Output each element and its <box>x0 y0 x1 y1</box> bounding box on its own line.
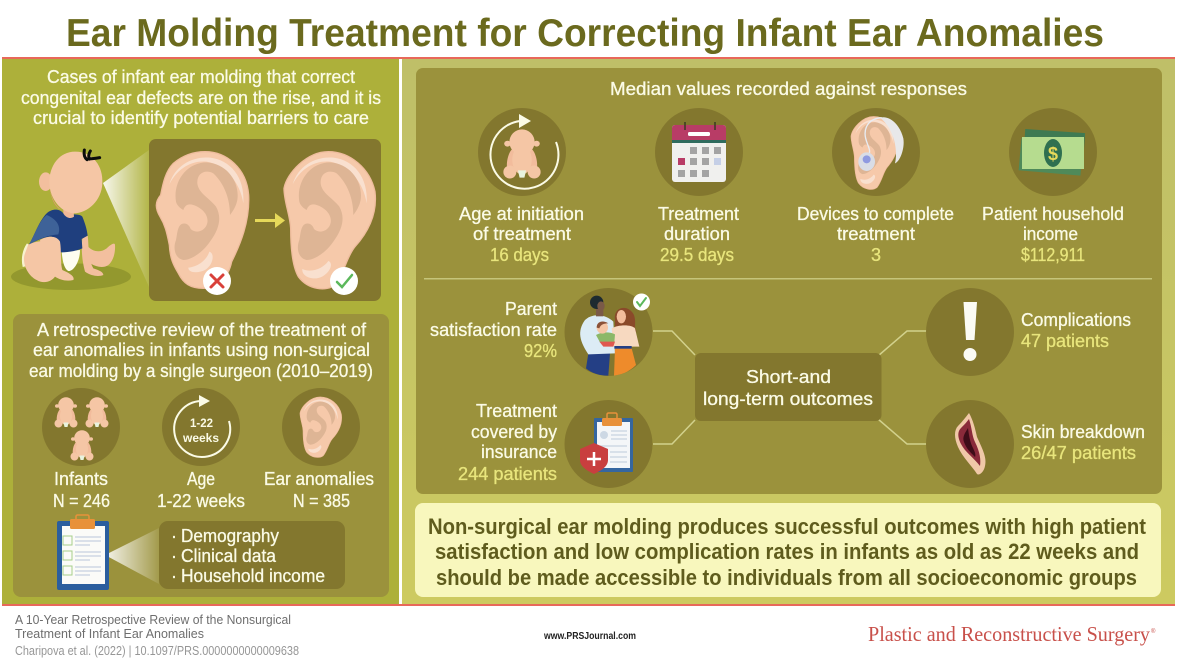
icon: baby in cycle <box>478 108 566 196</box>
stat: infants <box>53 469 110 511</box>
outcome: parent satisfaction: satisfaction rate <box>430 320 557 340</box>
icon: deformed ear <box>156 152 249 288</box>
outcome: insurance coverage <box>458 401 557 484</box>
outcome: skin breakdown <box>1021 422 1145 463</box>
panel: results <box>416 68 1162 494</box>
panel: right background <box>402 59 1175 605</box>
metric: devices: 3 <box>871 245 881 265</box>
panel: conclusion: satisfaction and low complication rates in infants as old as 22 weeks and <box>435 539 1139 564</box>
callout: data collected: Demography <box>181 526 279 546</box>
stat: ear anomalies: N = 385 <box>293 491 350 511</box>
icon: insurance clipboard <box>564 400 652 488</box>
beam from clipboard <box>105 528 159 584</box>
icon: seated baby <box>11 150 131 290</box>
intro text <box>21 67 381 128</box>
panel: study design <box>13 314 389 597</box>
connector lines <box>653 331 927 444</box>
outcome: skin breakdown: 26/47 patients <box>1021 443 1136 463</box>
icon: age cycle: weeks <box>182 431 219 445</box>
outcome: insurance coverage: 244 patients <box>458 464 557 484</box>
metric: devices <box>797 204 954 265</box>
icon: banknotes: $ <box>1048 144 1058 164</box>
journal name: Plastic and Reconstructive Surgery <box>868 622 1150 646</box>
outcome: insurance coverage: Treatment <box>476 401 557 421</box>
metric: household income: $112,911 <box>1021 245 1085 265</box>
callout: data collected <box>159 521 345 589</box>
outcome: complications: Complications <box>1021 310 1131 330</box>
icon: skin wound <box>926 400 1014 488</box>
icon: ear <box>282 388 360 466</box>
icon: hearing aid ear <box>832 108 920 196</box>
panel: conclusion: should be made accessible to individuals from all socioeconomic groups <box>436 565 1137 590</box>
arrow <box>255 213 285 228</box>
icon: calendar <box>655 108 743 196</box>
icon: check badge <box>330 267 358 295</box>
callout: data collected: Clinical data <box>181 546 277 566</box>
metric: treatment duration <box>658 204 739 265</box>
icon: age cycle: 1-22 <box>190 416 213 430</box>
stat: infants: N = 246 <box>53 491 110 511</box>
metric: treatment duration: 29.5 days <box>660 245 734 265</box>
outcomes box: long-term outcomes <box>703 389 873 409</box>
callout: data collected: Household income <box>181 566 325 586</box>
metric: household income: income <box>1023 224 1078 244</box>
outcome: parent satisfaction: Parent <box>505 299 557 319</box>
icon: banknotes <box>1009 108 1097 196</box>
panel: introduction <box>11 67 381 301</box>
icon: corrected ear <box>284 152 375 289</box>
icon: three infants <box>42 388 120 466</box>
footer url: www.PRSJournal.com <box>543 631 636 642</box>
footer citation: Charipova et al. (2022) | 10.1097/PRS.0000000000009638 <box>15 644 299 658</box>
title: Ear Molding Treatment for Correcting Infant Ear Anomalies <box>66 12 1104 55</box>
journal name: ® <box>1151 628 1156 635</box>
icon: cross badge <box>203 267 231 295</box>
outcome: parent satisfaction: 92% <box>524 341 557 361</box>
outcomes box <box>695 353 882 421</box>
footer citation <box>15 613 299 658</box>
stat: ear anomalies: Ear anomalies <box>264 469 374 489</box>
metric: age at initiation: of treatment <box>473 224 571 244</box>
study description: ear molding by a single surgeon (2010–2019) <box>29 361 373 381</box>
metric: treatment duration: duration <box>664 224 730 244</box>
outcomes box: Short-and <box>746 367 831 387</box>
callout: data collected: · <box>171 546 177 566</box>
outcome: complications <box>1021 310 1131 351</box>
metric: devices: Devices to complete <box>797 204 954 224</box>
stat: ear anomalies <box>264 469 374 511</box>
metric: age at initiation <box>459 204 584 265</box>
stat: age: 1-22 weeks <box>157 491 245 511</box>
metric: devices: treatment <box>837 224 915 244</box>
outcome: complications: 47 patients <box>1021 331 1109 351</box>
study description: A retrospective review of the treatment of <box>37 320 367 340</box>
stat: age: Age <box>187 469 215 489</box>
stat: age <box>157 469 245 511</box>
results heading: Median values recorded against responses <box>610 79 967 99</box>
callout: data collected: · <box>171 526 177 546</box>
stat: infants: Infants <box>54 469 108 489</box>
icon: clipboard <box>57 515 109 590</box>
outcome: insurance coverage: insurance <box>481 442 557 462</box>
panel: ear comparison <box>149 139 381 301</box>
metric: age at initiation: 16 days <box>490 245 549 265</box>
panel: left background <box>2 59 399 605</box>
outcome: parent satisfaction <box>430 299 557 361</box>
outcome: insurance coverage: covered by <box>471 422 557 442</box>
study description: ear anomalies in infants using non-surgical <box>33 340 370 360</box>
metric: household income: Patient household <box>982 204 1124 224</box>
footer citation: Treatment of Infant Ear Anomalies <box>15 627 204 641</box>
intro text: congenital ear defects are on the rise, and it is <box>21 88 381 108</box>
intro text: crucial to identify potential barriers to care <box>33 108 369 128</box>
outcome: skin breakdown: Skin breakdown <box>1021 422 1145 442</box>
metric: household income <box>982 204 1124 265</box>
beam from baby ear <box>103 150 149 287</box>
callout: data collected: · <box>171 566 177 586</box>
panel: conclusion <box>415 503 1161 597</box>
icon: exclamation mark <box>926 288 1014 376</box>
footer citation: A 10-Year Retrospective Review of the Nonsurgical <box>15 613 291 627</box>
intro text: Cases of infant ear molding that correct <box>47 67 355 87</box>
study description <box>29 320 373 381</box>
metric: treatment duration: Treatment <box>658 204 739 224</box>
icon: family <box>564 288 652 376</box>
icon: age cycle <box>162 388 240 466</box>
metric: age at initiation: Age at initiation <box>459 204 584 224</box>
